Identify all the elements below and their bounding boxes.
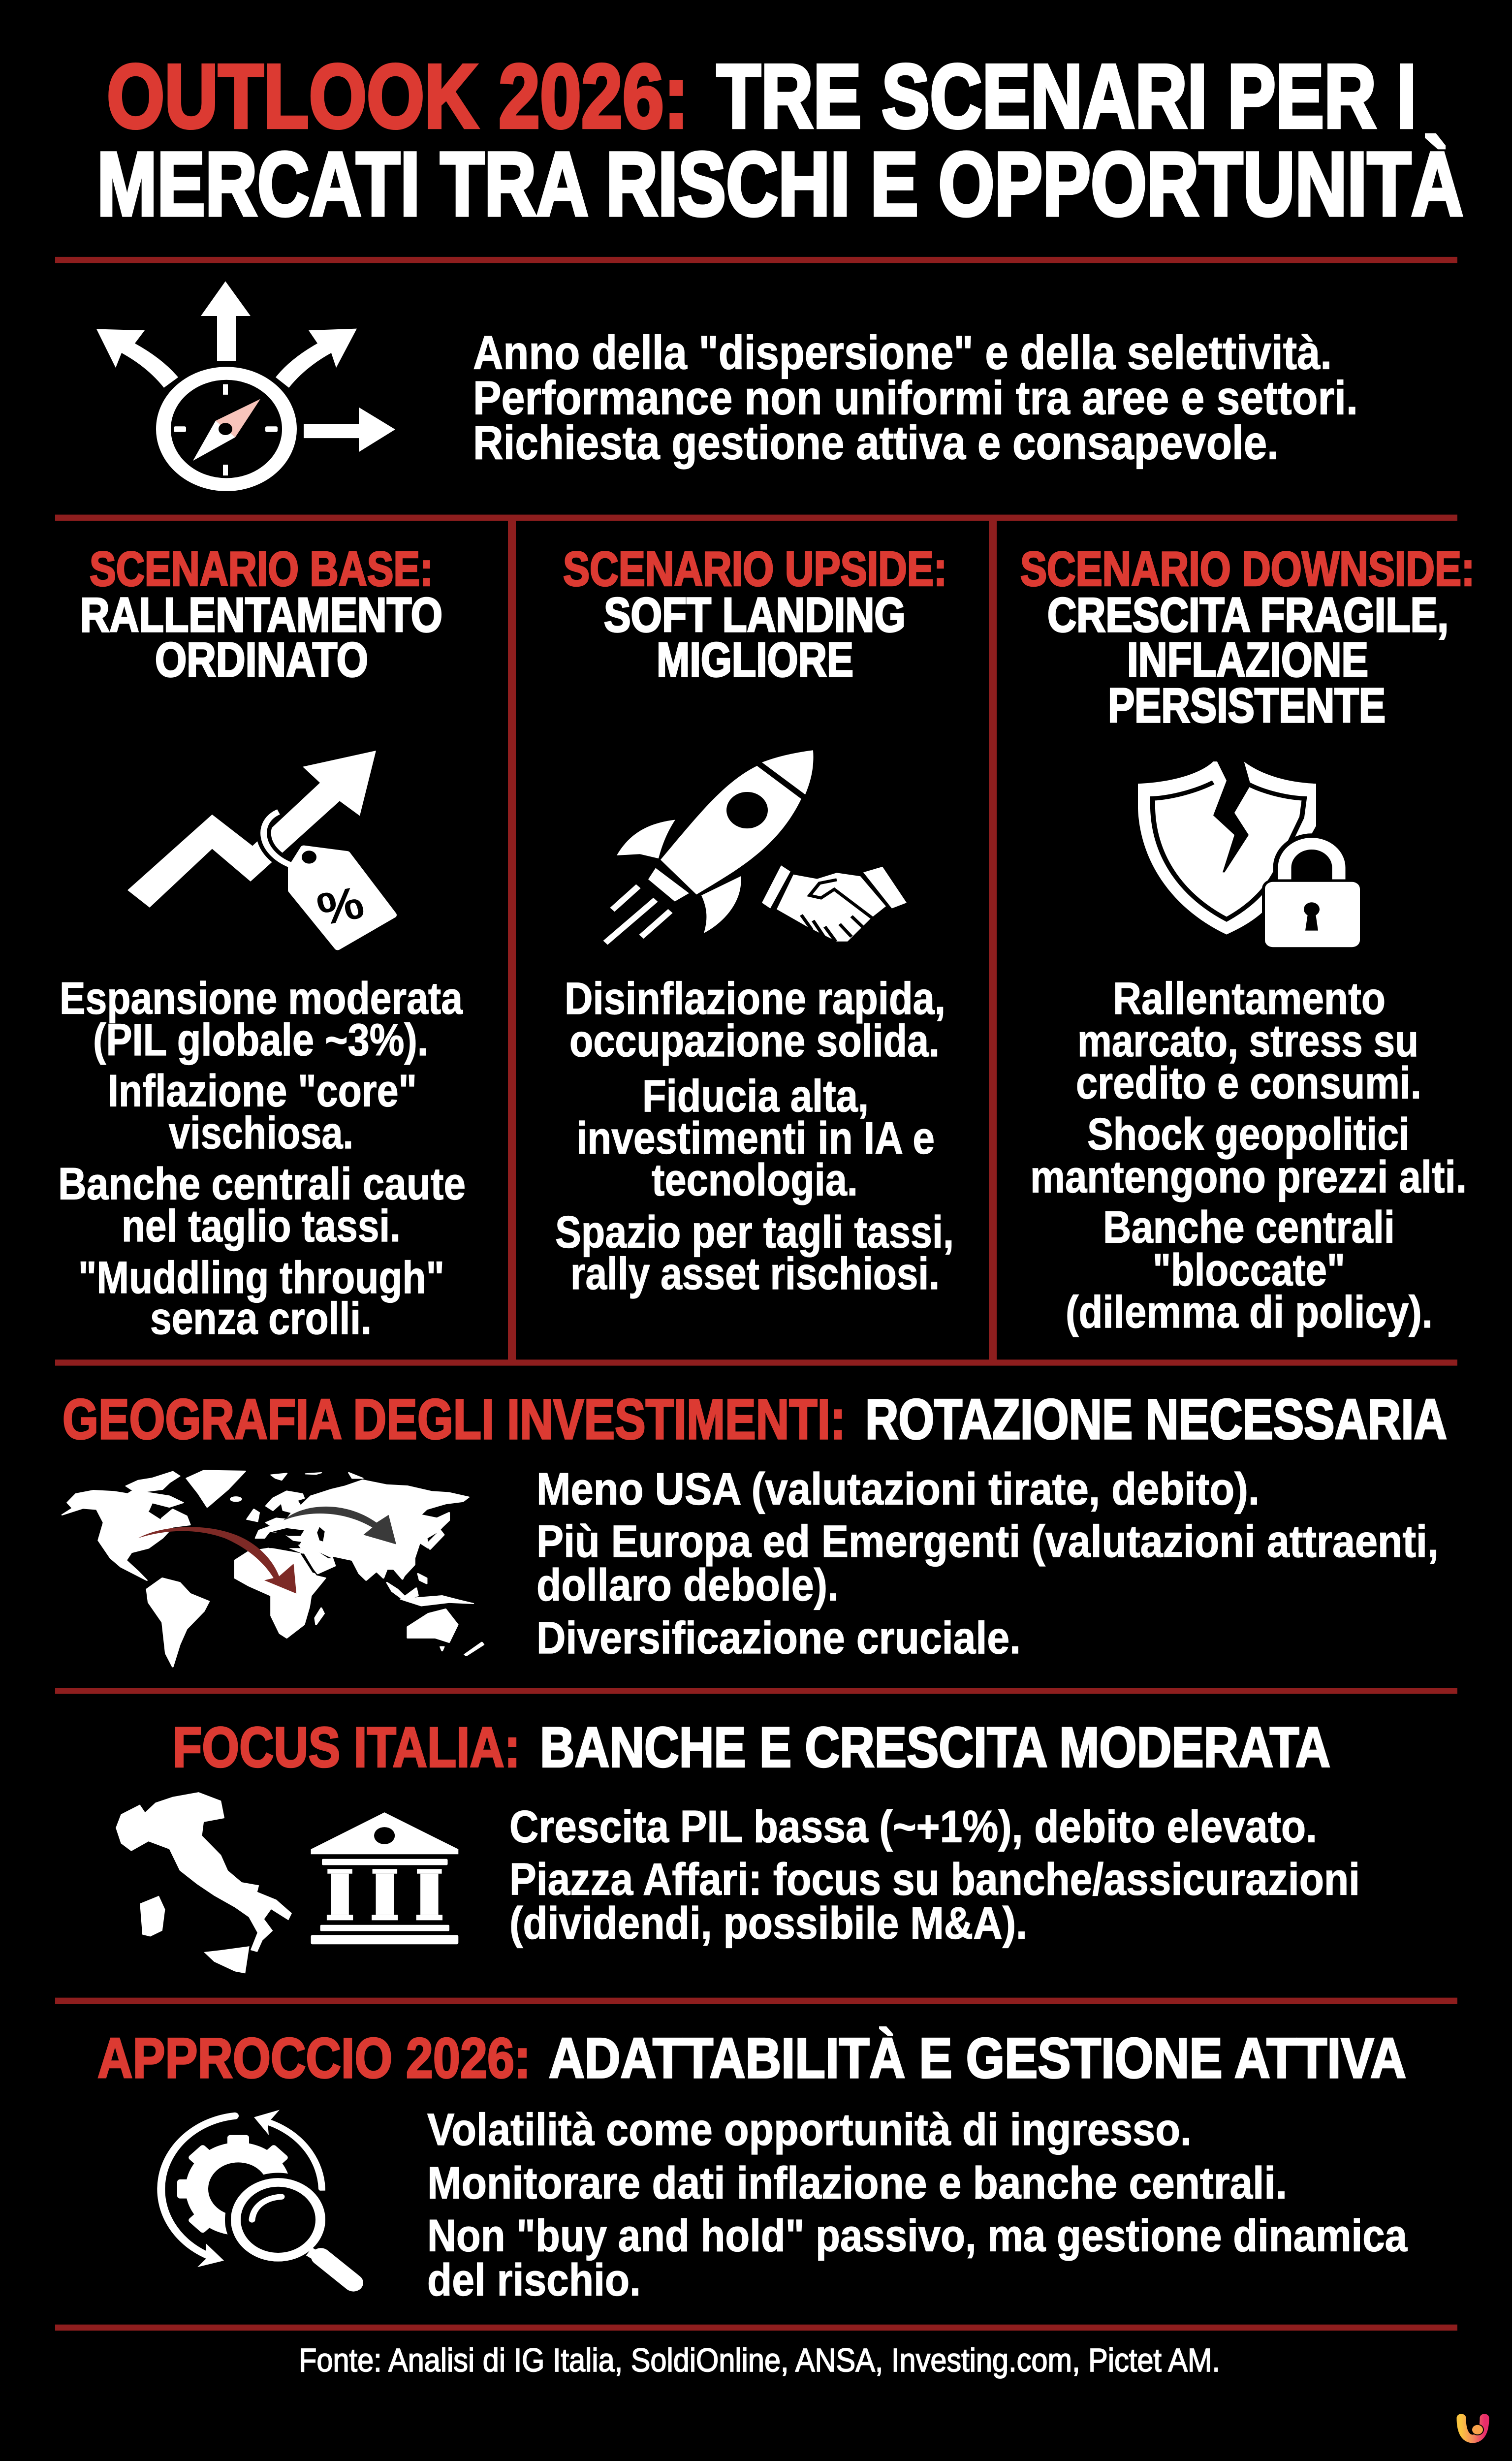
text: scenario downside: Rallentamento [1113, 973, 1386, 1024]
text: scenario downside: "bloccate" [1153, 1244, 1345, 1295]
text: scenario downside: Banche centrali [1103, 1201, 1395, 1252]
text: geografia: Diversificazione cruciale. [536, 1612, 1021, 1663]
heading: scenario downside: PERSISTENTE [1108, 679, 1386, 732]
text: approccio 2026 [427, 2104, 1408, 2305]
arrow: usa to africa [138, 1527, 296, 1594]
text: scenario base: Espansione moderata [60, 973, 463, 1023]
heading: approccio 2026 [97, 2026, 1406, 2089]
text: scenario upside: Spazio per tagli tassi, [555, 1206, 954, 1257]
text: scenario upside: Disinflazione rapida, [565, 973, 945, 1024]
text: scenario upside: occupazione solida. [569, 1015, 940, 1066]
title: OUTLOOK 2026: [107, 45, 689, 147]
heading: scenario upside: MIGLIORE [657, 633, 853, 687]
text: scenario downside: Shock geopolitici [1087, 1108, 1410, 1159]
text: scenario base: nel taglio tassi. [122, 1200, 401, 1251]
panel: scenario upside [555, 542, 954, 1299]
text: scenario base [58, 973, 466, 1344]
text: scenario upside: tecnologia. [652, 1154, 858, 1205]
icon: handshake [762, 865, 907, 942]
heading: focus italia [173, 1716, 1330, 1779]
text: approccio 2026: del rischio. [427, 2254, 641, 2305]
intro text: Richiesta gestione attiva e consapevole. [473, 416, 1279, 469]
text: scenario base: vischiosa. [169, 1107, 353, 1158]
heading: scenario upside [563, 542, 947, 687]
text: focus italia: Crescita PIL bassa (~+1%), debito elevato. [509, 1801, 1317, 1852]
source line: Fonte: Analisi di IG Italia, SoldiOnline, ANSA, Investing.com, Pictet AM. [299, 2342, 1220, 2379]
panel: scenario base [58, 542, 466, 1344]
text: focus italia [509, 1801, 1360, 1948]
text: scenario upside: Fiducia alta, [642, 1071, 869, 1121]
heading: scenario base [80, 542, 442, 687]
heading: scenario base: ORDINATO [155, 633, 368, 687]
inland seas [149, 1507, 332, 1574]
heading: scenario base: SCENARIO BASE: [90, 542, 433, 596]
icon: rocket [605, 750, 813, 943]
heading: geografia degli investimenti: GEOGRAFIA DEGLI INVESTIMENTI: [63, 1388, 846, 1451]
text: scenario upside: investimenti in IA e [576, 1112, 935, 1163]
heading: scenario upside: SOFT LANDING [604, 588, 906, 642]
text: geografia: dollaro debole). [536, 1559, 839, 1610]
text: scenario base: "Muddling through" [78, 1252, 444, 1303]
icon: gear with magnifier and cycle arrows [161, 2110, 353, 2283]
intro text [473, 326, 1358, 469]
heading: approccio 2026: APPROCCIO 2026: [97, 2026, 531, 2089]
continents [62, 1471, 484, 1667]
text: geografia [536, 1463, 1439, 1663]
text: focus italia: (dividendi, possibile M&A). [509, 1897, 1027, 1948]
text: approccio 2026: Monitorare dati inflazione e banche centrali. [427, 2157, 1287, 2208]
icon: rising arrow with percent tag [127, 751, 393, 947]
text: scenario base: (PIL globale ~3%). [93, 1014, 428, 1065]
text: geografia: Meno USA (valutazioni tirate, debito). [536, 1463, 1260, 1514]
title [97, 45, 1463, 234]
text: scenario downside [1030, 973, 1467, 1337]
icon: broken shield with padlock [1138, 760, 1360, 947]
world map with arrows [62, 1471, 484, 1667]
heading: scenario downside [1020, 542, 1475, 732]
icon: map of italy [116, 1792, 292, 1973]
panel: scenario downside [1020, 542, 1475, 1337]
arrow: europe to asia [283, 1507, 396, 1545]
text: scenario upside [555, 973, 954, 1299]
text: scenario base: Inflazione "core" [108, 1065, 417, 1116]
heading: focus italia: FOCUS ITALIA: [173, 1716, 520, 1779]
icon: bank temple [311, 1812, 458, 1944]
heading: scenario upside: SCENARIO UPSIDE: [563, 542, 947, 596]
heading: scenario base: RALLENTAMENTO [80, 588, 442, 642]
text: scenario base: senza crolli. [150, 1293, 372, 1344]
icon: compass with arrows [96, 281, 395, 485]
text: scenario upside: rally asset rischiosi. [570, 1248, 940, 1299]
text: scenario base: Banche centrali caute [58, 1158, 466, 1209]
icon: rising arrow with percent tag: % [312, 877, 369, 935]
heading: scenario downside: INFLAZIONE [1127, 633, 1368, 687]
text: approccio 2026: Volatilità come opportunità di ingresso. [427, 2104, 1192, 2155]
logo [1461, 2418, 1484, 2439]
